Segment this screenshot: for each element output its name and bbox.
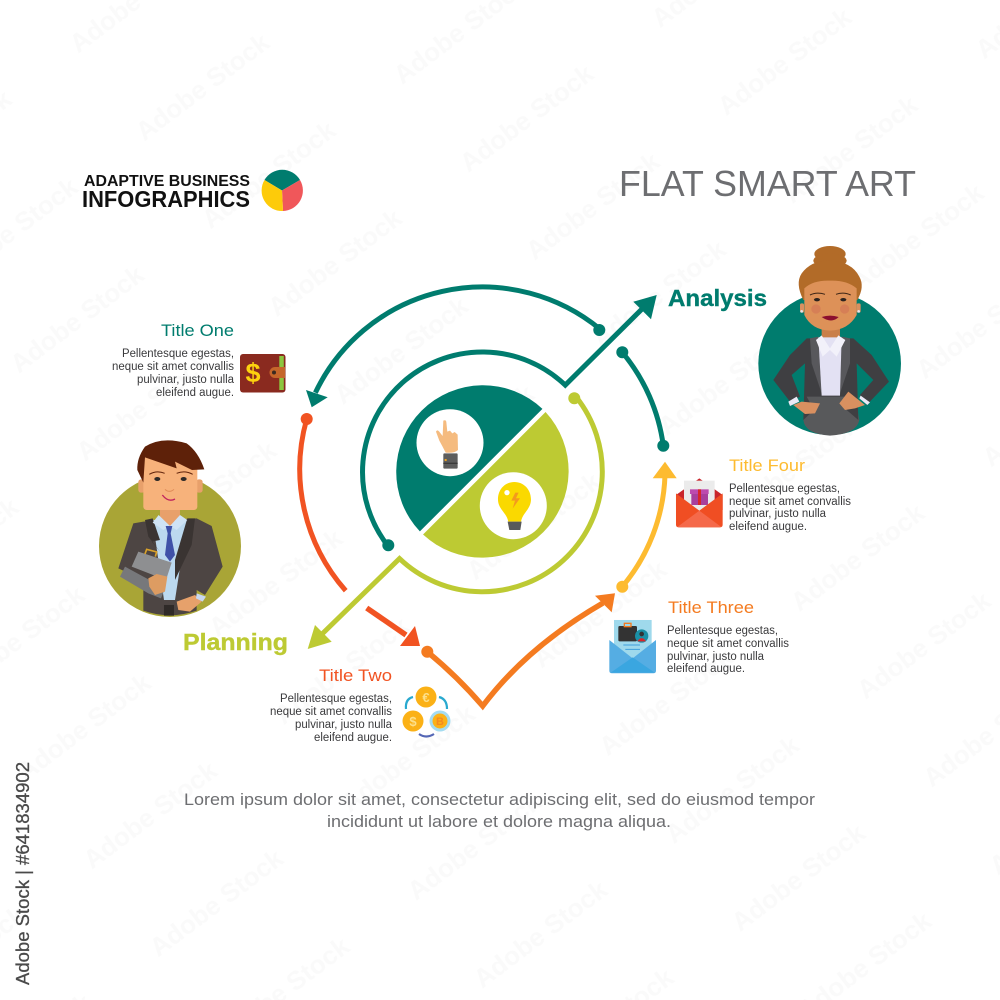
text block: Title One: Title One <box>161 321 234 340</box>
text block: Title One <box>112 321 235 399</box>
text block: Title Two: pulvinar, justo nulla <box>295 719 393 731</box>
red arrow <box>367 608 420 646</box>
icon: wallet <box>240 354 286 392</box>
text block: Title Three <box>667 598 789 675</box>
inner ring: teal arc to Analysis arrow <box>363 295 657 551</box>
text block: Title Four: eleifend augue. <box>729 521 807 533</box>
icon: blue envelope <box>609 620 656 673</box>
text block: Title Two: Title Two <box>319 666 392 685</box>
footer caption <box>184 790 815 831</box>
text block: Title One: eleifend augue. <box>156 387 234 399</box>
text block: Title Three: eleifend augue. <box>667 663 745 675</box>
text block: Title Two: Pellentesque egestas, <box>280 693 392 705</box>
outer ring: teal right arc <box>616 346 669 452</box>
main title: FLAT SMART ART <box>619 163 916 204</box>
footer caption: Lorem ipsum dolor sit amet, consectetur adipiscing elit, sed do eiusmod tempor <box>184 790 815 809</box>
text block: Title Three: neque sit amet convallis <box>667 638 789 650</box>
outer ring: teal arrow arc <box>306 287 605 407</box>
text block: Title Four: pulvinar, justo nulla <box>729 508 827 520</box>
text block: Title Two: eleifend augue. <box>314 732 392 744</box>
text block: Title Two: neque sit amet convallis <box>270 706 392 718</box>
inner ring: olive arc to Planning arrow <box>308 392 602 649</box>
side credit: Adobe Stock | #641834902 <box>13 762 33 985</box>
icon: wallet: $ <box>245 358 261 388</box>
center pie <box>396 385 569 558</box>
text block: Title Four: Pellentesque egestas, <box>729 483 840 495</box>
logo text: ADAPTIVE BUSINESS <box>84 173 250 190</box>
icon: businessman in circle <box>99 440 241 617</box>
footer caption: incididunt ut labore et dolore magna aliqua. <box>327 812 671 831</box>
text block: Title Four: neque sit amet convallis <box>729 496 851 508</box>
icon: currency exchange: B <box>436 716 444 728</box>
logo text: INFOGRAPHICS <box>82 186 250 212</box>
text block: Title One: neque sit amet convallis <box>112 361 234 373</box>
icon: currency exchange <box>402 686 450 736</box>
logo text <box>82 173 250 212</box>
label: Analysis: Analysis <box>668 285 767 311</box>
icon: red envelope with gift <box>676 478 723 527</box>
text block: Title Three: pulvinar, justo nulla <box>667 651 765 663</box>
icon: businesswoman in circle <box>758 246 901 436</box>
text block: Title Three: Pellentesque egestas, <box>667 625 778 637</box>
icon: light bulb <box>498 482 531 530</box>
briefcase <box>120 567 165 598</box>
icon: pointing hand <box>436 420 458 469</box>
logo icon: pie <box>262 170 303 211</box>
text block: Title One: pulvinar, justo nulla <box>137 374 235 386</box>
label: Planning: Planning <box>183 629 288 655</box>
text block: Title Two <box>270 666 393 744</box>
red arc <box>300 413 346 591</box>
icon: currency exchange: € <box>422 690 430 705</box>
text block: Title Three: Title Three <box>668 598 754 617</box>
text block: Title One: Pellentesque egestas, <box>122 348 234 360</box>
orange arrow <box>421 593 615 706</box>
icon: currency exchange: $ <box>409 714 417 729</box>
yellow arrow <box>616 462 677 593</box>
text block: Title Four: Title Four <box>729 456 805 475</box>
text block: Title Four <box>729 456 851 533</box>
